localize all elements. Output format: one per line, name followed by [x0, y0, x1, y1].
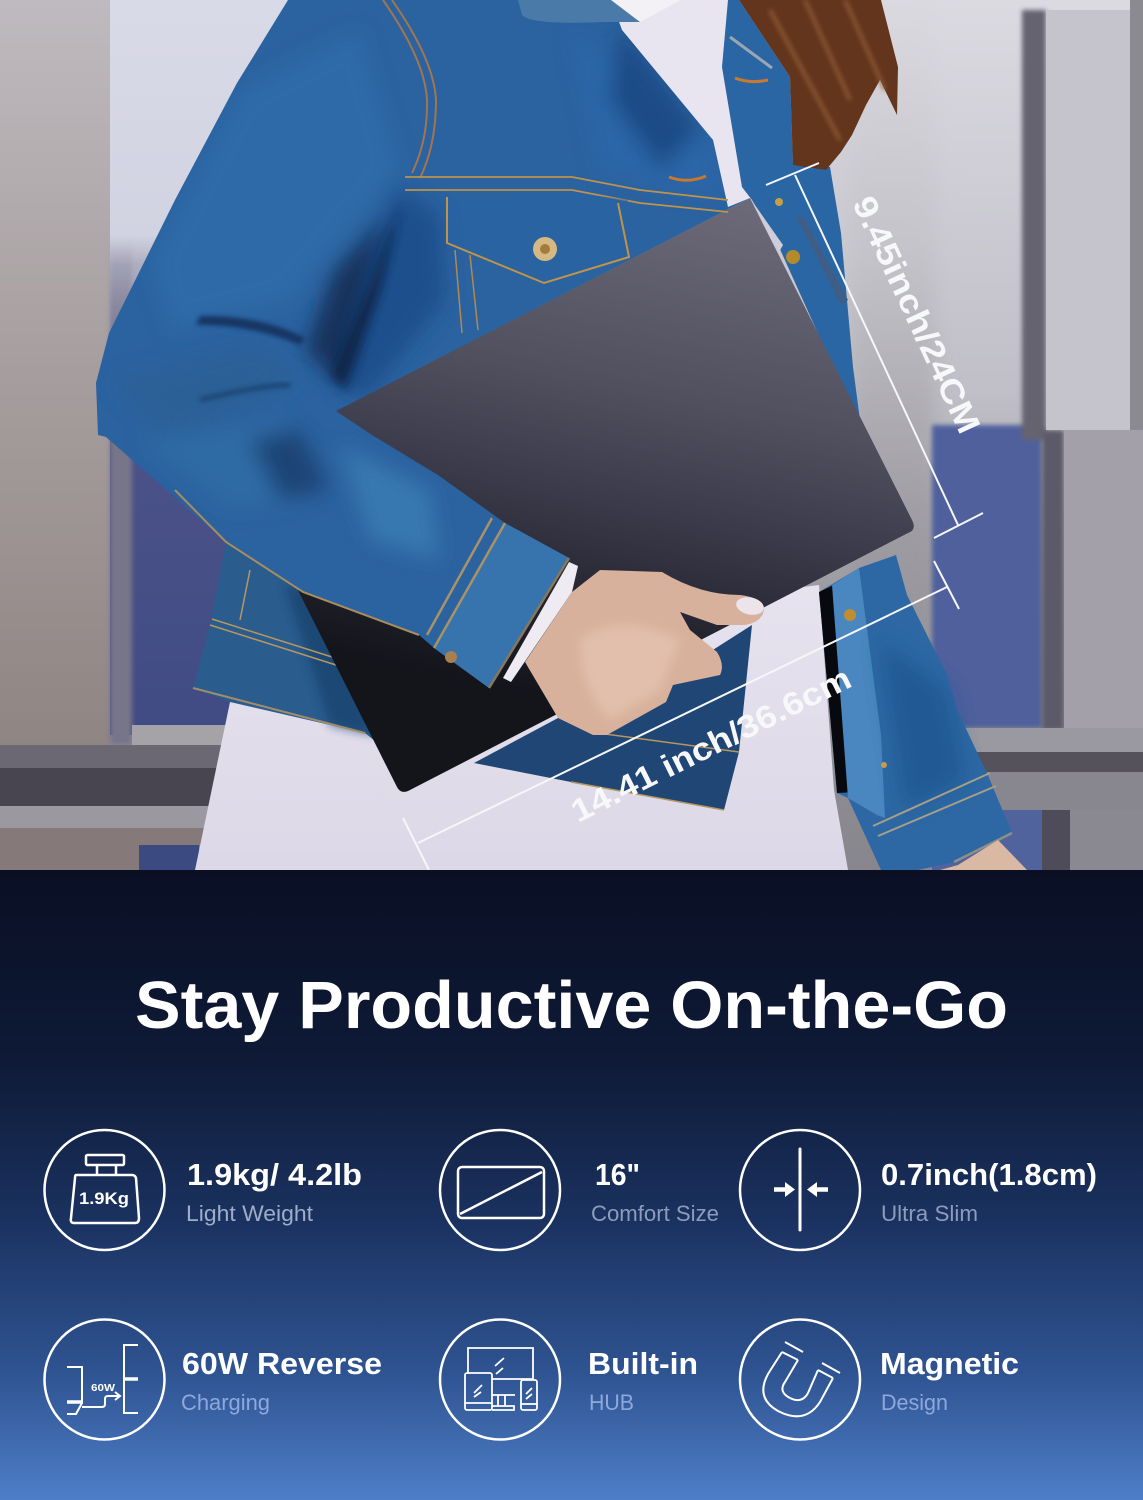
laptop: [234, 198, 914, 792]
label: Ultra Slim: [881, 1201, 978, 1226]
shirt: [195, 585, 848, 870]
icon: thickness arrows: [740, 1130, 860, 1250]
dimension label: width: 14.41 inch/36.6cm: [565, 660, 857, 829]
collar tip: [518, 0, 640, 23]
hand shading: [580, 625, 680, 720]
hand: [525, 570, 765, 735]
fingernail: [735, 595, 765, 617]
value: 16": [595, 1157, 640, 1192]
yoke band: [405, 177, 728, 212]
photo: woman carrying laptop: [0, 0, 1143, 890]
dimension line: height: [766, 163, 983, 538]
cuff: [434, 523, 569, 688]
panel: features: [0, 870, 1143, 1500]
background building: [0, 0, 1143, 890]
chest pocket: [447, 176, 706, 333]
hair: [739, 0, 898, 170]
label: Design: [881, 1390, 948, 1415]
value: Magnetic: [880, 1346, 1019, 1381]
icon: reverse charging: 60W: [91, 1382, 115, 1394]
icon: screen: [440, 1130, 560, 1250]
feature: size: [440, 1130, 719, 1250]
shirt cuff: [503, 562, 578, 682]
value: 1.9kg/ 4.2lb: [187, 1157, 362, 1192]
dimension label: height: 9.45inch/24CM: [846, 190, 988, 439]
jacket: lower left front: [193, 542, 380, 745]
label: Light Weight: [186, 1201, 313, 1226]
jacket: sleeve and chest: [96, 0, 750, 688]
feature: charging: [44, 1320, 382, 1440]
jacket: right chest: [722, 0, 866, 440]
dimension line: width: [403, 561, 959, 870]
shoulder seam: [383, 0, 436, 178]
label: Charging: [181, 1390, 270, 1415]
icon: reverse charging: [44, 1320, 164, 1440]
collar tip highlight: [611, 0, 681, 22]
feature: magnetic: [740, 1320, 1019, 1440]
icon: weight: [44, 1130, 164, 1250]
sleeve lower seam: [175, 490, 419, 635]
icon: weight: 1.9Kg: [79, 1189, 129, 1208]
value: Built-in: [588, 1346, 698, 1381]
jacket hem stitch: [571, 732, 739, 810]
icon: magnet: [740, 1320, 860, 1440]
hand at lower right: [940, 840, 1027, 870]
shirt upper: [611, 0, 752, 210]
feature: slim: [740, 1130, 1097, 1250]
jacket: right lower sleeve: [819, 555, 1012, 870]
value: 60W Reverse: [182, 1346, 382, 1381]
value: 0.7inch(1.8cm): [881, 1157, 1097, 1192]
sleeve shading: [110, 25, 720, 560]
jacket: lower front under hand: [474, 625, 752, 810]
label: Comfort Size: [591, 1201, 719, 1226]
feature: hub: [440, 1320, 698, 1440]
title: Stay Productive On-the-Go: [135, 968, 1008, 1043]
label: HUB: [589, 1390, 634, 1415]
feature: weight: [44, 1130, 362, 1250]
icon: devices: [440, 1320, 560, 1440]
